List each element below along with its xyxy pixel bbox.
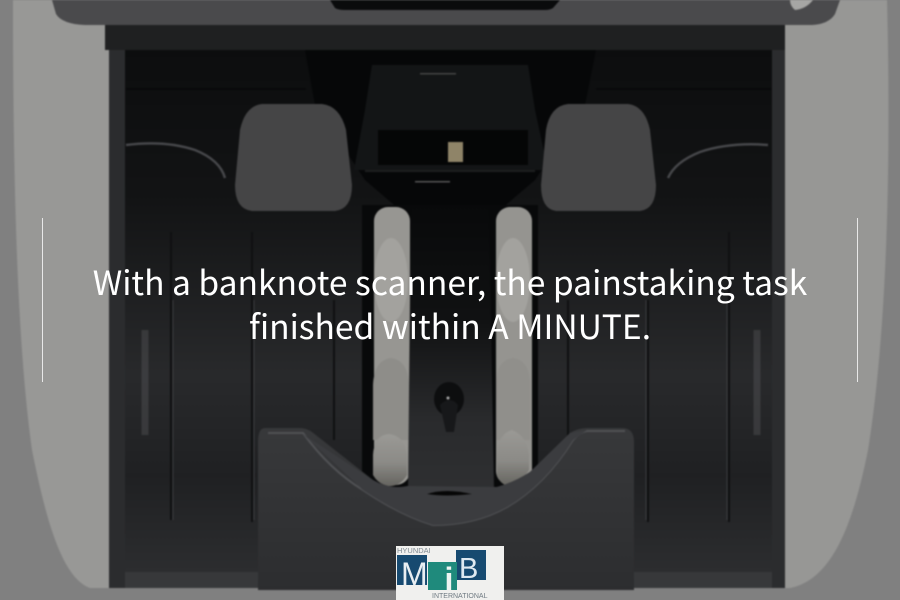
headline text: With a banknote scanner, the painstaking task bbox=[93, 256, 807, 305]
headline text bbox=[93, 256, 807, 349]
logo: Hyundai MIB International bbox=[396, 546, 504, 600]
left roller channel bbox=[362, 205, 412, 490]
left guide curve bbox=[126, 143, 225, 178]
dark feed well bbox=[109, 28, 785, 588]
logo mark: INTERNATIONAL bbox=[432, 593, 488, 600]
left lever bbox=[235, 104, 352, 211]
well side walls bbox=[109, 50, 785, 588]
headline text: finished within A MINUTE. bbox=[249, 300, 651, 349]
right lever bbox=[541, 104, 656, 211]
logo mark: B bbox=[459, 553, 478, 585]
output tray bbox=[258, 428, 634, 590]
right roller channel bbox=[488, 205, 538, 490]
centre plate and keyhole bbox=[408, 205, 494, 490]
logo mark bbox=[397, 546, 488, 600]
logo mark: i bbox=[445, 561, 453, 597]
centre mechanism bbox=[305, 50, 596, 210]
scanner body: left side bbox=[13, 0, 112, 588]
top cover bbox=[52, 0, 840, 50]
scanner body: right side bbox=[775, 0, 888, 588]
left vertical rule bbox=[42, 218, 43, 382]
right guide curve bbox=[668, 144, 768, 178]
logo mark: M bbox=[401, 556, 428, 592]
right vertical rule bbox=[857, 218, 858, 382]
logo mark: HYUNDAI bbox=[397, 546, 431, 555]
